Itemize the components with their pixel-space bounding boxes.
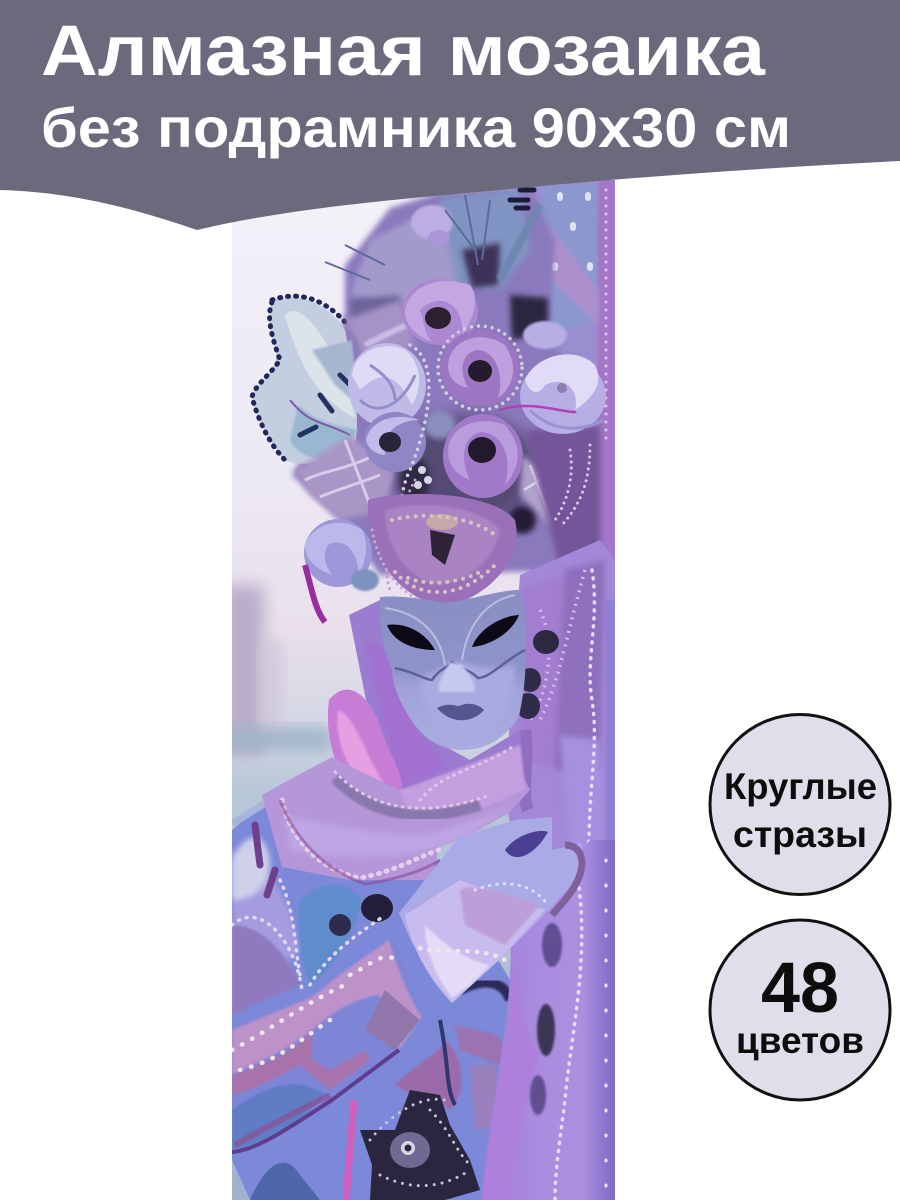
lower veil: [482, 840, 615, 1200]
embroidered dark brooch: [250, 1090, 480, 1200]
badge text: стразы: стразы: [733, 814, 867, 855]
rose: top: [402, 279, 478, 345]
rose: centre with pearls: [438, 326, 522, 410]
pink satin collar: [328, 690, 402, 797]
crown diadem: [368, 494, 517, 606]
bodice embroidery: [232, 780, 525, 1200]
rose: pale left: [348, 343, 426, 427]
blurred city background: [232, 198, 530, 1200]
pink cord: [346, 1100, 354, 1200]
badge: round rhinestones: [710, 714, 890, 894]
rose: pale right: [520, 354, 606, 434]
lower bodice details: [395, 983, 510, 1130]
header banner: [0, 0, 900, 230]
badge: 48 colours: [710, 920, 890, 1100]
hood drape: [349, 600, 525, 800]
rose: lower centre: [443, 414, 523, 498]
title line 2: без подрамника 90х30 см: [41, 96, 791, 159]
picture: masked figure in purple costume: [222, 175, 615, 1200]
feathered headdress mass: [292, 186, 600, 575]
right veil upper panel: [525, 175, 615, 580]
badge text: Круглые: Круглые: [724, 766, 877, 807]
badge number: 48: 48: [761, 949, 839, 1028]
title line 1: Алмазная мозаика: [41, 12, 766, 91]
lace net fan: [252, 296, 358, 464]
pearl strands: [387, 345, 590, 590]
arm sleeve: [232, 940, 422, 1152]
side rose: [304, 519, 379, 622]
title: [41, 12, 791, 159]
feathers and dark centre of headdress: [295, 300, 600, 570]
badge text: цветов: цветов: [736, 1020, 864, 1061]
rose: lower left: [364, 412, 426, 472]
mask face: [380, 590, 526, 750]
scarf with beaded trim: [262, 745, 530, 884]
right drape beside face: [508, 540, 615, 850]
satin glove and cuff: [399, 817, 582, 1003]
